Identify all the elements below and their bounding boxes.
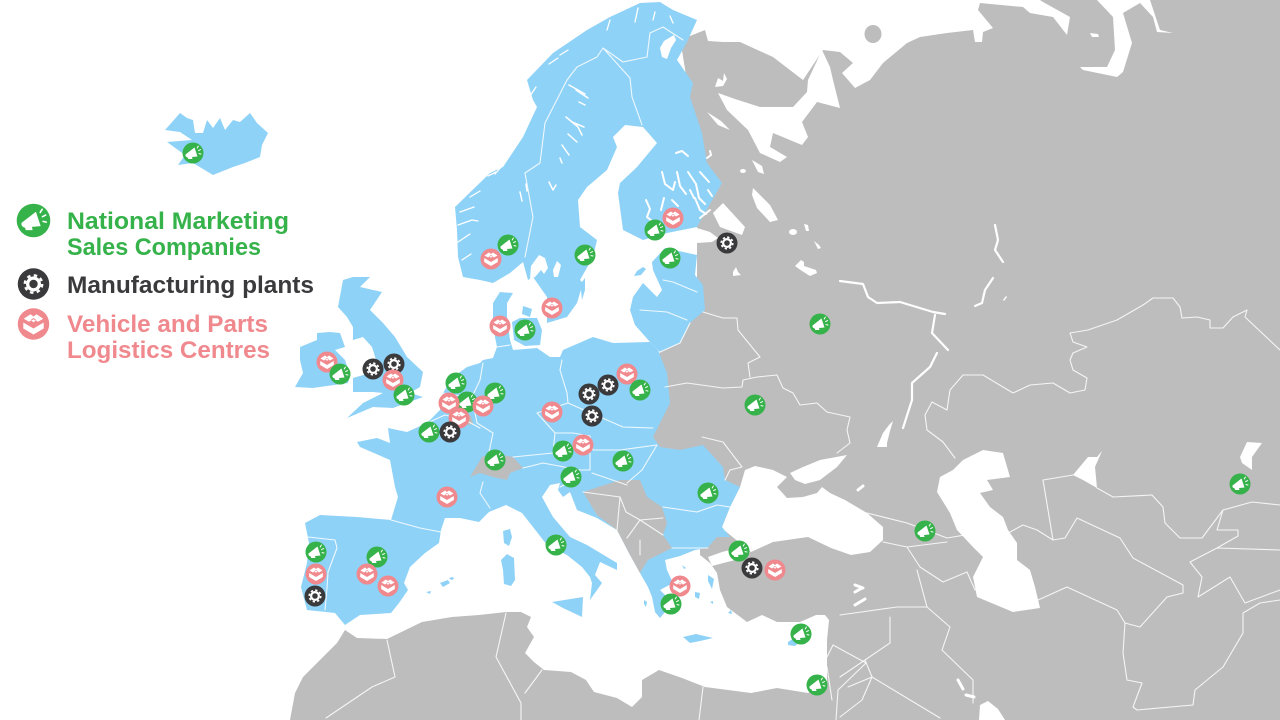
region: Balkans, non-highlighted countries xyxy=(583,480,672,573)
marker: Kazakhstan sales company xyxy=(1230,474,1250,494)
marker: Switzerland sales company xyxy=(484,450,506,470)
marker: Caucasus sales company xyxy=(914,520,936,542)
region: Denmark islands xyxy=(512,306,542,346)
marker: Greece sales company xyxy=(660,594,682,614)
region: Russia, Eastern Europe, Turkey, Middle East and Central Asia xyxy=(650,0,1280,720)
region: Iceland xyxy=(165,113,268,175)
region: United Kingdom xyxy=(338,277,423,418)
marker: Israel sales company xyxy=(806,674,828,696)
legend label: National Marketing Sales Companies: National Marketing xyxy=(67,208,289,235)
marker: Norway sales company xyxy=(498,234,518,256)
region: Mediterranean and Baltic islands xyxy=(426,267,802,646)
marker: Czech plant xyxy=(578,384,600,404)
marker: UK sales company xyxy=(394,384,414,406)
marker: Norway logistics centre xyxy=(480,248,502,270)
marker: Greece logistics centre xyxy=(670,576,690,596)
marker: France sales company xyxy=(418,422,440,442)
marker: Sweden sales company xyxy=(574,244,596,266)
marker: Poland plant south xyxy=(582,406,602,426)
marker: Spain logistics centre south xyxy=(378,576,398,596)
marker: Poland plant xyxy=(598,374,618,396)
legend label: Vehicle and Parts Logistics Centres: Logistics Centres xyxy=(67,337,270,364)
legend label: Manufacturing plants: Manufacturing plants xyxy=(67,272,314,299)
marker: Romania sales company xyxy=(698,482,718,504)
legend xyxy=(17,204,314,364)
marker: UK logistics centre xyxy=(382,370,404,390)
marker: France logistics centre xyxy=(436,486,458,508)
legend label: National Marketing Sales Companies: Sales Companies xyxy=(67,234,261,261)
marker: Turkey sales company xyxy=(728,540,750,562)
marker: Spain sales company xyxy=(366,546,388,568)
marker: Austria sales company xyxy=(552,440,574,462)
marker: Poland sales company xyxy=(630,380,650,400)
marker: Sweden logistics centre xyxy=(542,298,562,318)
marker: Turkey plant xyxy=(742,558,762,578)
region: Ireland xyxy=(295,332,350,388)
marker: Poland logistics centre xyxy=(616,364,638,384)
marker: Belgium sales company xyxy=(456,392,478,412)
marker: France plant xyxy=(440,422,460,442)
small grey island in the Barents Sea xyxy=(864,25,882,43)
region: Switzerland xyxy=(470,453,523,480)
marker: Germany logistics centre west xyxy=(472,396,494,416)
marker: Portugal plant xyxy=(304,586,326,606)
marker: Finland sales company xyxy=(644,220,666,240)
marker: Portugal logistics centre xyxy=(306,564,326,584)
region: Baltic states xyxy=(630,248,705,352)
marker: Turkey logistics centre xyxy=(764,560,786,580)
region: Luxembourg xyxy=(465,414,473,425)
marker: Slovenia sales company xyxy=(560,466,582,488)
marker: Germany sales company xyxy=(484,382,506,404)
marker: Iceland sales company xyxy=(182,142,204,164)
marker: Denmark sales company xyxy=(514,320,536,340)
marker: Portugal sales company xyxy=(306,542,326,562)
marker: Spain logistics centre xyxy=(356,564,378,584)
marker: St Petersburg plant xyxy=(716,232,738,254)
marker: Ireland logistics centre xyxy=(316,352,338,372)
marker: Belgium logistics centre south xyxy=(448,408,470,428)
marker: UK plant north xyxy=(384,354,404,374)
national borders xyxy=(308,27,1280,720)
marker: Russia sales company xyxy=(810,314,830,334)
legend icon: vehicle and parts logistics centres xyxy=(18,308,49,340)
marker: Ireland sales company xyxy=(330,364,350,384)
marker: Cyprus sales company xyxy=(790,624,812,644)
marker: Netherlands sales company xyxy=(446,372,466,394)
marker: Finland logistics centre xyxy=(662,208,684,228)
marker: Denmark logistics centre xyxy=(490,316,510,336)
legend icon: manufacturing plants xyxy=(18,268,49,300)
marker: Austria logistics centre xyxy=(572,434,594,456)
marker: Germany logistics centre east xyxy=(542,402,562,422)
marker: Ukraine sales company xyxy=(744,394,766,416)
region: Norway, Sweden and Finland xyxy=(455,2,722,323)
Scandinavian lakes and fjords xyxy=(458,8,712,279)
marker: UK plant west xyxy=(362,358,384,380)
location markers xyxy=(182,142,1250,696)
marker: Italy sales company xyxy=(546,534,566,556)
region: continental Europe xyxy=(301,292,740,625)
marker: Belgium logistics centre xyxy=(438,392,460,414)
seas and lakes xyxy=(707,0,1262,720)
marker: Estonia sales company xyxy=(660,248,680,268)
legend label: Vehicle and Parts Logistics Centres: Vehicle and Parts xyxy=(67,311,268,338)
marker: Hungary sales company xyxy=(612,450,634,472)
legend icon: national marketing sales companies xyxy=(17,204,50,237)
region: North Africa xyxy=(290,612,840,720)
